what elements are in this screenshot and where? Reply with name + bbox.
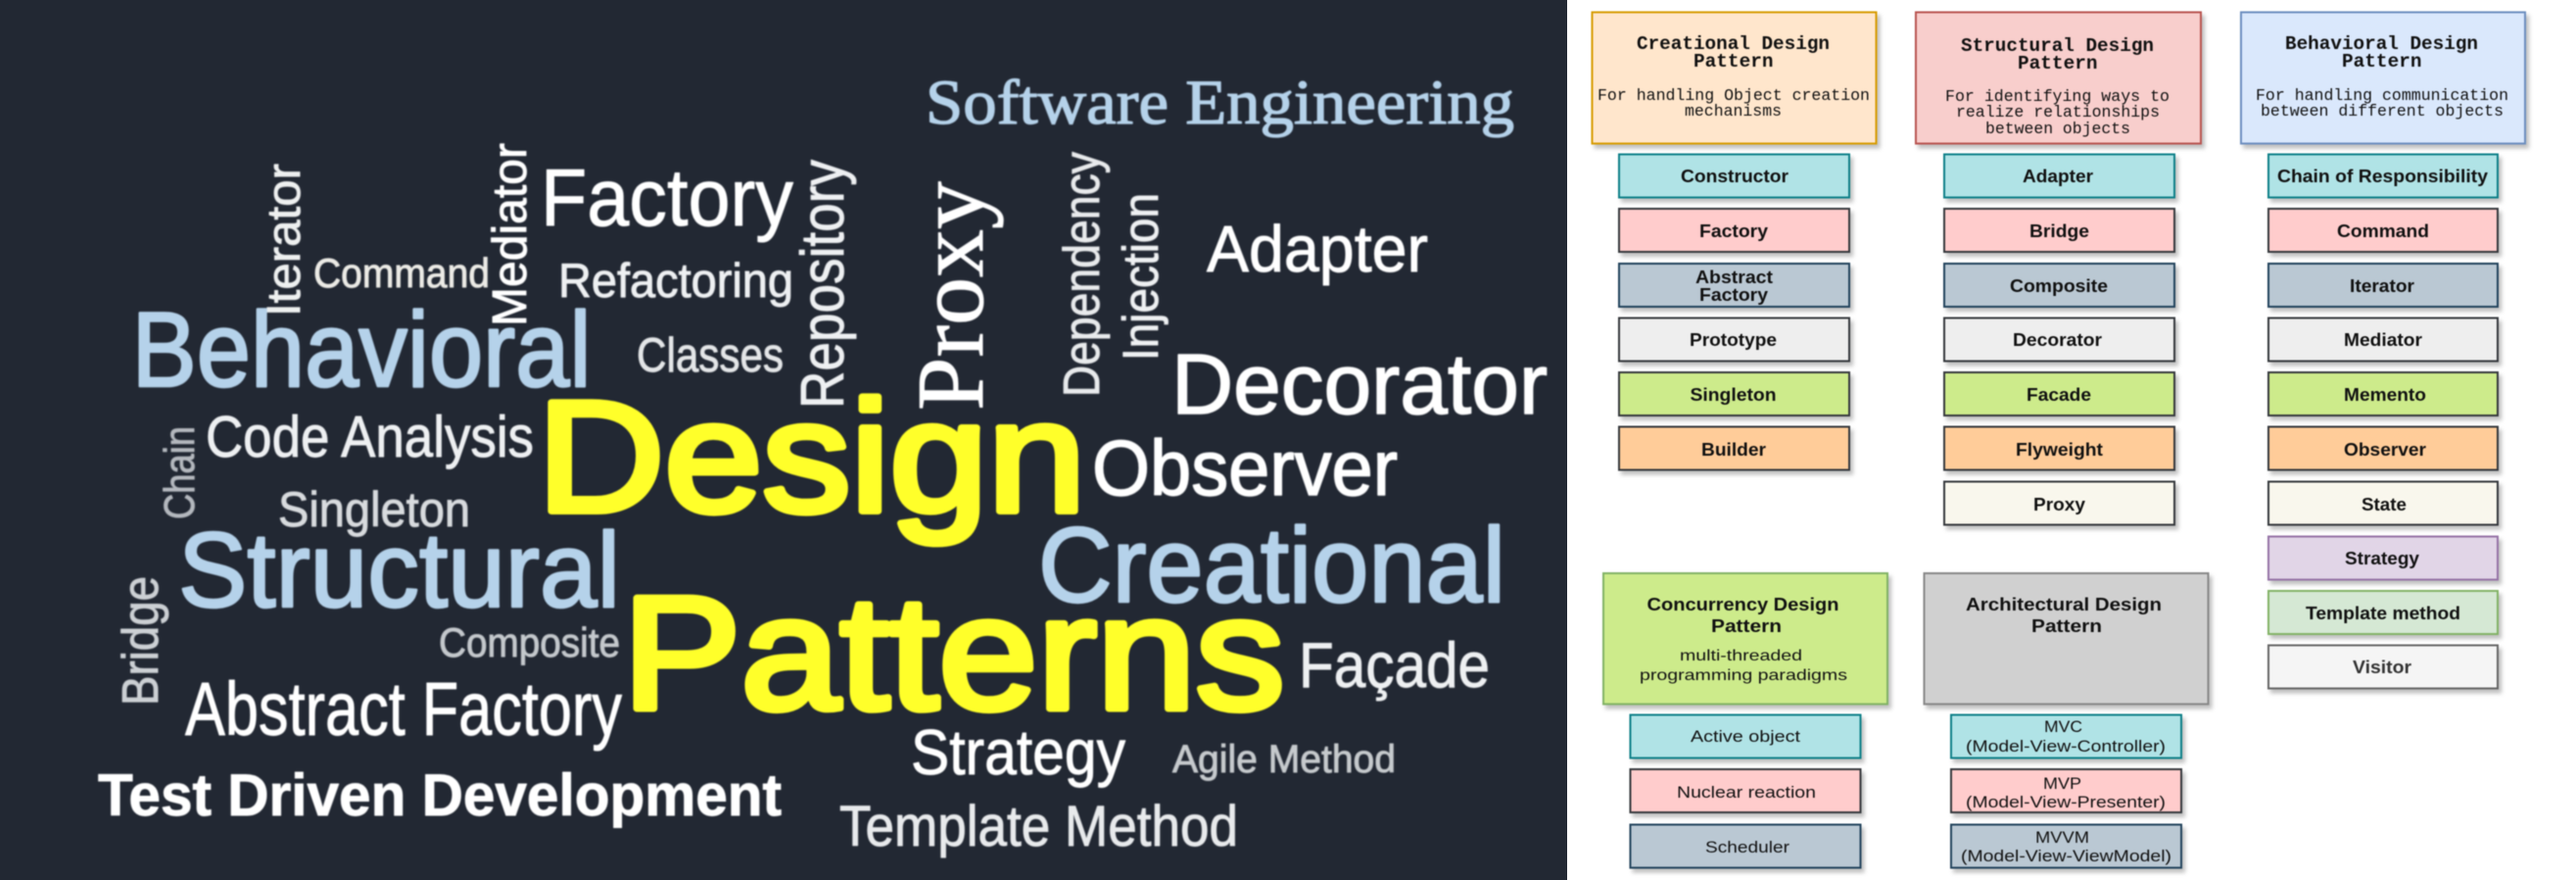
word: Classes: Classes bbox=[637, 329, 784, 382]
item: Composite bbox=[1944, 264, 2174, 307]
header: Concurrency Design Pattern: multi-threaded bbox=[1680, 648, 1802, 664]
word: Observer: Observer bbox=[1092, 424, 1398, 512]
header: Behavioral Design Pattern: Pattern bbox=[2342, 51, 2421, 73]
header: Architectural Design Pattern: Pattern bbox=[2031, 616, 2102, 636]
word: Injection: Injection bbox=[1113, 193, 1169, 361]
item: Visitor bbox=[2268, 645, 2498, 688]
item: MVP: MVP bbox=[2043, 774, 2081, 793]
item: Adapter bbox=[1944, 155, 2174, 198]
item: Chain of Responsibility: Chain of Responsibility bbox=[2277, 167, 2488, 186]
item: Abstract Factory bbox=[1619, 264, 1849, 307]
panel: word cloud bbox=[98, 68, 1548, 858]
item: MVC bbox=[1951, 715, 2181, 758]
word: Repository: Repository bbox=[789, 160, 857, 409]
word: Composite: Composite bbox=[439, 619, 620, 665]
header: Structural Design Pattern: Structural Design bbox=[1961, 35, 2154, 57]
header: Behavioral Design Pattern: Behavioral Design bbox=[2285, 33, 2478, 55]
item: Template method: Template method bbox=[2306, 604, 2460, 623]
header: Concurrency Design Pattern bbox=[1603, 573, 1887, 704]
item: MVC: (Model-View-Controller) bbox=[1966, 737, 2166, 756]
item: MVP: (Model-View-Presenter) bbox=[1966, 793, 2166, 811]
word: Chain: Chain bbox=[156, 426, 204, 519]
word: Design: Design bbox=[537, 368, 1085, 545]
header: Concurrency Design Pattern: programming paradigms bbox=[1640, 667, 1847, 684]
header: Behavioral Design Pattern: For handling communication bbox=[2256, 87, 2508, 106]
item: Proxy bbox=[1944, 482, 2174, 525]
word: Bridge: Bridge bbox=[113, 576, 169, 706]
column: creational bbox=[1593, 12, 1877, 470]
word: Dependency: Dependency bbox=[1054, 152, 1111, 397]
word: Behavioral: Behavioral bbox=[131, 290, 592, 410]
word: Factory: Factory bbox=[541, 152, 793, 243]
header: Architectural Design Pattern bbox=[1924, 573, 2208, 704]
word: Creational: Creational bbox=[1038, 506, 1505, 625]
item: Memento bbox=[2268, 372, 2498, 416]
item: Bridge bbox=[1944, 209, 2174, 252]
item: Active object bbox=[1630, 715, 1861, 758]
item: Memento: Memento bbox=[2344, 385, 2426, 405]
item: Scheduler bbox=[1630, 825, 1861, 868]
header: Behavioral Design Pattern: between different objects bbox=[2261, 103, 2504, 122]
item: Builder: Builder bbox=[1701, 440, 1766, 460]
item: Nuclear reaction bbox=[1630, 769, 1861, 812]
item: Prototype: Prototype bbox=[1690, 330, 1777, 350]
column: behavioral bbox=[2241, 12, 2525, 688]
header: Structural Design Pattern bbox=[1916, 12, 2201, 143]
item: Template method bbox=[2268, 591, 2498, 634]
word: Template Method: Template Method bbox=[839, 795, 1238, 858]
word: Test Driven Development: Test Driven Development bbox=[98, 762, 782, 828]
item: MVVM: (Model-View-ViewModel) bbox=[1961, 847, 2171, 865]
panel: word cloud background bbox=[0, 0, 1567, 880]
column: concurrency bbox=[1603, 573, 1887, 868]
word: Façade: Façade bbox=[1299, 629, 1490, 701]
item: Facade: Facade bbox=[2027, 385, 2091, 405]
item: Iterator: Iterator bbox=[2350, 276, 2414, 296]
word: Agile Method: Agile Method bbox=[1172, 738, 1396, 781]
word: Patterns: Patterns bbox=[623, 563, 1285, 743]
item: MVC: MVC bbox=[2044, 717, 2082, 736]
item: Iterator bbox=[2268, 264, 2498, 307]
item: Factory: Factory bbox=[1699, 221, 1768, 241]
item: Constructor: Constructor bbox=[1681, 167, 1789, 186]
item: Abstract Factory: Factory bbox=[1699, 285, 1768, 305]
item: Chain of Responsibility bbox=[2268, 155, 2498, 198]
item: Singleton: Singleton bbox=[1691, 385, 1777, 405]
item: MVVM: MVVM bbox=[2035, 828, 2089, 847]
item: Mediator bbox=[2268, 318, 2498, 361]
item: Facade bbox=[1944, 372, 2174, 416]
item: State: State bbox=[2361, 495, 2407, 514]
item: Singleton bbox=[1619, 372, 1849, 416]
header: Concurrency Design Pattern: Pattern bbox=[1711, 616, 1782, 636]
item: Builder bbox=[1619, 427, 1849, 470]
header: Creational Design Pattern: For handling Object creation bbox=[1598, 87, 1870, 106]
header: Creational Design Pattern bbox=[1593, 12, 1877, 143]
item: Command bbox=[2268, 209, 2498, 252]
item: Flyweight: Flyweight bbox=[2016, 440, 2103, 460]
word: Adapter: Adapter bbox=[1207, 213, 1428, 286]
item: Decorator bbox=[1944, 318, 2174, 361]
header: Structural Design Pattern: For identifying ways to bbox=[1945, 88, 2170, 107]
word: Command: Command bbox=[313, 250, 490, 296]
item: Strategy bbox=[2268, 537, 2498, 580]
header: Creational Design Pattern: Pattern bbox=[1693, 51, 1773, 73]
word: Mediator: Mediator bbox=[484, 143, 537, 326]
item: Factory bbox=[1619, 209, 1849, 252]
word: Software Engineering: Software Engineering bbox=[926, 68, 1514, 138]
item: Visitor: Visitor bbox=[2353, 658, 2411, 677]
item: Strategy: Strategy bbox=[2345, 549, 2419, 568]
header: Behavioral Design Pattern bbox=[2241, 12, 2525, 143]
word: Strategy: Strategy bbox=[911, 716, 1125, 788]
word: Refactoring: Refactoring bbox=[558, 255, 793, 308]
header: Creational Design Pattern: Creational Design bbox=[1637, 33, 1830, 55]
item: Flyweight bbox=[1944, 427, 2174, 470]
word: Proxy: Proxy bbox=[898, 181, 1004, 411]
word: Abstract Factory: Abstract Factory bbox=[185, 667, 622, 752]
item: MVVM bbox=[1951, 825, 2181, 868]
header: Structural Design Pattern: realize relationships bbox=[1956, 104, 2160, 122]
word: Decorator: Decorator bbox=[1171, 337, 1548, 432]
header: Creational Design Pattern: mechanisms bbox=[1685, 103, 1782, 122]
item: MVP bbox=[1951, 769, 2181, 812]
word: Structural: Structural bbox=[178, 511, 620, 630]
word: Iterator: Iterator bbox=[259, 164, 310, 317]
header: Architectural Design Pattern: Architectural Design bbox=[1966, 595, 2162, 614]
column: structural bbox=[1916, 12, 2201, 525]
item: Scheduler: Scheduler bbox=[1705, 838, 1789, 856]
item: Constructor bbox=[1619, 155, 1849, 198]
item: Bridge: Bridge bbox=[2029, 221, 2089, 241]
item: State bbox=[2268, 482, 2498, 525]
header: Concurrency Design Pattern: Concurrency Design bbox=[1647, 595, 1839, 614]
item: Prototype bbox=[1619, 318, 1849, 361]
item: Adapter: Adapter bbox=[2023, 167, 2093, 186]
header: Structural Design Pattern: Pattern bbox=[2018, 53, 2098, 74]
item: Composite: Composite bbox=[2010, 276, 2108, 296]
column: architectural bbox=[1924, 573, 2208, 868]
item: Mediator: Mediator bbox=[2344, 330, 2422, 350]
item: Proxy: Proxy bbox=[2033, 495, 2085, 514]
header: Structural Design Pattern: between objects bbox=[1985, 121, 2130, 139]
item: Nuclear reaction: Nuclear reaction bbox=[1677, 783, 1816, 802]
item: Active object: Active object bbox=[1691, 727, 1800, 746]
item: Abstract Factory: Abstract bbox=[1695, 268, 1773, 287]
word: Code Analysis: Code Analysis bbox=[206, 405, 534, 469]
panel: design pattern catalogue bbox=[1593, 12, 2525, 868]
item: Observer: Observer bbox=[2344, 440, 2426, 460]
item: Command: Command bbox=[2337, 221, 2429, 241]
item: Decorator: Decorator bbox=[2013, 330, 2102, 350]
word: Singleton: Singleton bbox=[278, 482, 470, 537]
item: Observer bbox=[2268, 427, 2498, 470]
